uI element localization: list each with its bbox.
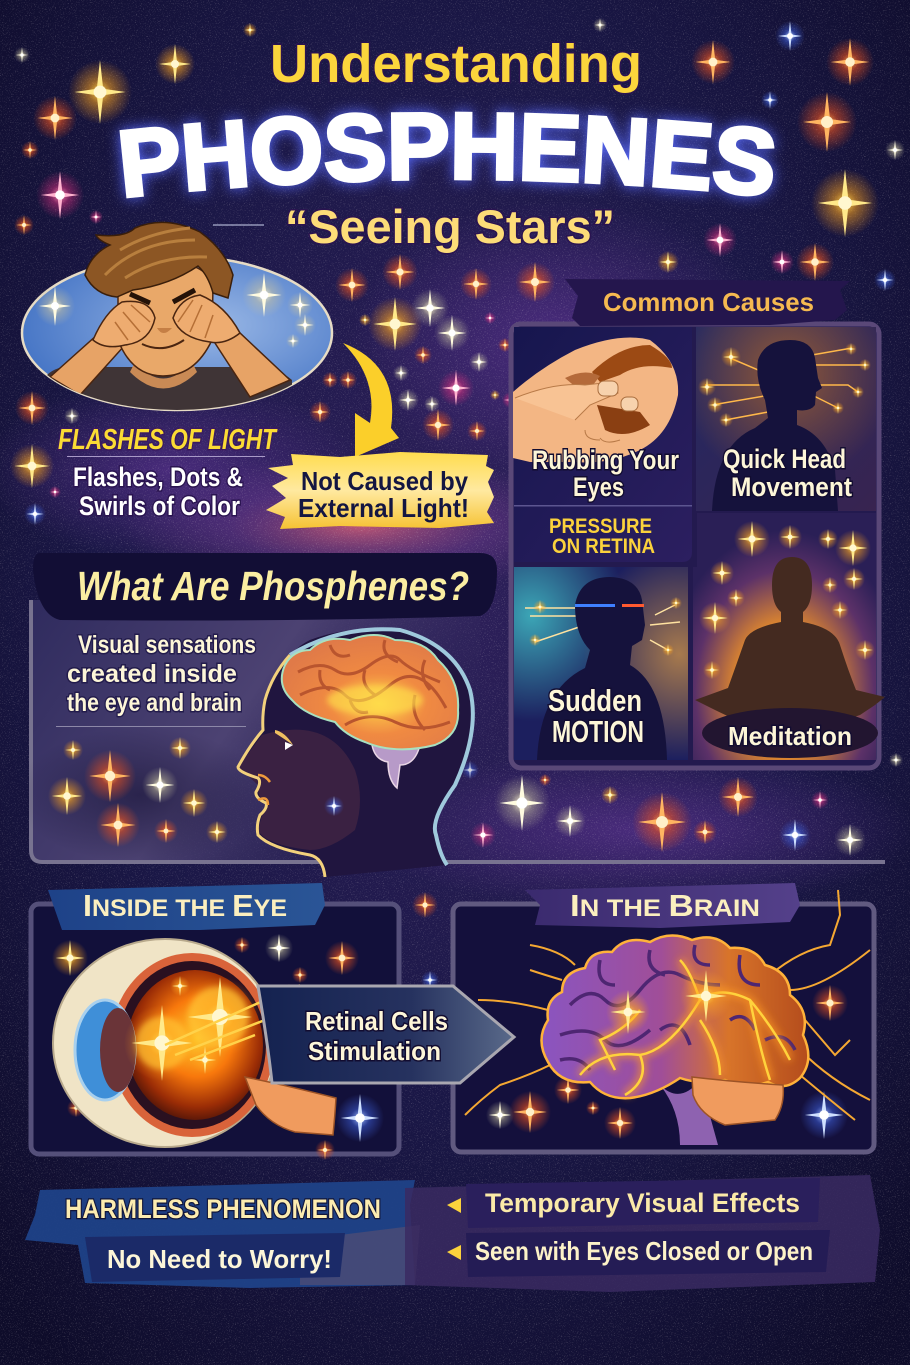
effect: temporary xyxy=(447,1178,820,1228)
eyeball xyxy=(53,939,277,1147)
big brain xyxy=(542,935,808,1098)
cause: rubbing your eyes: ON RETINA xyxy=(552,535,655,558)
cause: sudden motion xyxy=(514,567,688,760)
banner: inside the eye: INSIDE THE EYE xyxy=(83,888,287,923)
lightning xyxy=(465,890,870,1120)
cause: meditation xyxy=(693,513,885,760)
arrow: retinal cells stimulation xyxy=(258,986,514,1083)
description: Visual sensations xyxy=(78,631,256,659)
sub-banner xyxy=(85,1233,345,1282)
heading band: common causes: Common Causes xyxy=(603,287,814,317)
hand: beneath eye xyxy=(245,1077,336,1135)
panel: temporary visual effects xyxy=(405,1175,880,1292)
callout: flashes of light: Flashes, Dots & xyxy=(73,462,243,492)
illustration: person rubbing eyes xyxy=(22,222,332,420)
banner: in the brain xyxy=(525,883,800,928)
effect: seen xyxy=(447,1230,830,1277)
banner: in the brain: IN THE BRAIN xyxy=(570,888,760,923)
star field xyxy=(10,18,905,989)
stem xyxy=(660,1080,718,1145)
cause: sudden motion: Sudden xyxy=(548,683,642,718)
arrow: curved yellow xyxy=(343,343,399,457)
arrow: retinal cells stimulation: Stimulation xyxy=(308,1036,441,1066)
banner: inside the eye xyxy=(48,883,325,930)
title: Understanding: Understanding xyxy=(270,34,642,94)
description xyxy=(56,631,256,727)
callout: flashes of light: Swirls of Color xyxy=(79,491,240,521)
callout: flashes of light xyxy=(58,424,278,521)
cause: quick head movement xyxy=(696,327,876,511)
callout: flashes of light: FLASHES OF LIGHT xyxy=(58,424,278,456)
title: PHOSPHENES: PHOSPHENES xyxy=(110,101,784,208)
arrow: retinal cells stimulation: Retinal Cells xyxy=(305,1006,448,1036)
panel: inside the eye xyxy=(31,904,399,1160)
cause: rubbing your eyes xyxy=(513,327,692,562)
heading band: common causes xyxy=(565,279,850,326)
cause: sudden motion: MOTION xyxy=(552,714,644,749)
banner: not caused by external light xyxy=(266,452,494,529)
sub-banner: No Need to Worry! xyxy=(107,1244,332,1274)
banner: not caused by external light: External Light! xyxy=(298,493,469,523)
subtitle: Seeing Stars: “Seeing Stars” xyxy=(285,200,615,253)
banner: not caused by external light: Not Caused by xyxy=(301,466,468,496)
panel: what are phosphenes xyxy=(15,553,885,877)
cause: rubbing your eyes: Eyes xyxy=(573,472,624,502)
label: HARMLESS PHENOMENON xyxy=(65,1194,381,1224)
cause: meditation: Meditation xyxy=(728,721,852,751)
head silhouette xyxy=(238,629,473,877)
panel: in the brain xyxy=(453,890,874,1152)
effect: seen: Seen with Eyes Closed or Open xyxy=(475,1236,813,1266)
heading band xyxy=(33,553,497,620)
hand: beneath brain xyxy=(692,1077,783,1125)
effect: temporary: Temporary Visual Effects xyxy=(485,1188,800,1218)
sun rays xyxy=(255,985,310,1030)
cause: rubbing your eyes: Rubbing Your xyxy=(532,445,679,475)
description: created inside xyxy=(67,660,237,688)
brain xyxy=(282,635,458,788)
description: the eye and brain xyxy=(67,689,242,717)
panel: common causes xyxy=(511,279,885,768)
sparkles xyxy=(15,727,265,863)
heading band: What Are Phosphenes? xyxy=(77,563,469,609)
banner: harmless phenomenon xyxy=(25,1180,420,1288)
cause: rubbing your eyes: PRESSURE xyxy=(549,515,652,538)
cause: quick head movement: Quick Head xyxy=(723,444,846,474)
cause: quick head movement: Movement xyxy=(731,472,852,502)
